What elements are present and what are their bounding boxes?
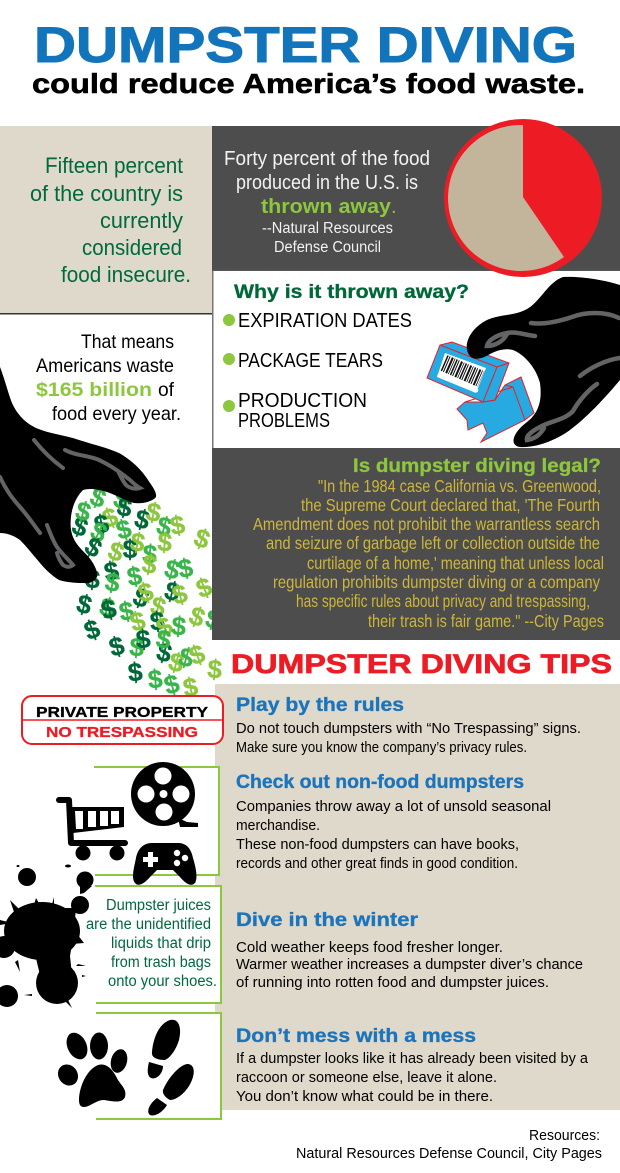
tip: play by the rules [236, 695, 581, 756]
tip: dive in the winter: Dive in the winter [236, 910, 419, 931]
icon: game controller [133, 843, 196, 885]
panel: forty percent: Forty percent of the food [224, 148, 430, 170]
icon: falling money: $ [185, 600, 210, 633]
tip: dive in the winter: of running into rotten food and dumpster juices. [236, 974, 549, 991]
icon: falling money: $ [106, 630, 128, 663]
text: americans waste [36, 331, 181, 425]
text: americans waste: $165 billion [36, 379, 152, 401]
tip: play by the rules: Make sure you know the company’s privacy rules. [236, 739, 527, 756]
panel: food insecurity: of the country is [30, 181, 183, 206]
icon: falling money: $ [192, 571, 216, 604]
icon: falling money: $ [140, 548, 160, 580]
subtitle: could reduce America’s food waste. [32, 68, 585, 99]
icon: falling money: $ [127, 605, 149, 638]
icon: falling money: $ [73, 588, 96, 621]
icon: falling money: $ [110, 483, 133, 516]
tip: play by the rules: Play by the rules [236, 695, 404, 716]
icon: falling money: $ [128, 526, 148, 558]
heading: tips: DUMPSTER DIVING TIPS [231, 649, 612, 679]
icon: paw print [54, 1029, 130, 1107]
resources [296, 1127, 602, 1162]
text: dumpster juices: from trash bags [111, 954, 211, 971]
panel: why thrown away [212, 270, 620, 448]
tip: dive in the winter: Cold weather keeps food fresher longer. [236, 939, 503, 956]
panel: forty percent: . [391, 196, 397, 218]
icon: falling money: $ [181, 671, 201, 703]
text: americans waste: That means [81, 331, 174, 353]
tip: mess: Don’t mess with a mess [236, 1026, 476, 1047]
icon: falling money: $ [86, 515, 112, 549]
panel: forty percent: --Natural Resources [262, 220, 393, 237]
heading: why: Why is it thrown away? [234, 282, 469, 303]
panel: food insecurity: food insecure. [61, 262, 191, 287]
icon: falling money: $ [104, 535, 129, 568]
heading: legal: Is dumpster diving legal? [353, 456, 601, 477]
icon: falling money: $ [131, 503, 154, 536]
icon: falling money: $ [127, 656, 144, 688]
icon: falling money: $ [135, 576, 157, 609]
list: reasons [223, 310, 412, 432]
panel: food insecurity: Fifteen percent [45, 153, 183, 178]
panel: tips background [215, 684, 620, 1110]
icon: falling money: $ [190, 522, 215, 555]
list: reasons: EXPIRATION DATES [238, 310, 412, 332]
icon: falling money: $ [169, 578, 191, 611]
icon: falling money: $ [170, 610, 188, 642]
icon: falling money: $ [176, 552, 196, 584]
panel: food insecurity [0, 126, 212, 314]
icon: falling money: $ [154, 623, 174, 655]
icon: falling money: $ [80, 613, 104, 646]
tip: play by the rules: Do not touch dumpsters with “No Trespassing” signs. [236, 720, 581, 737]
bracket: non-food [94, 767, 219, 875]
title: DUMPSTER DIVING [34, 17, 577, 73]
pie chart [444, 119, 602, 277]
icon: falling money: $ [72, 495, 95, 528]
panel: is it legal [212, 448, 620, 640]
panel: forty percent: thrown away [261, 196, 392, 218]
tip: non-food dumpsters: records and other great finds in good condition. [236, 855, 518, 872]
list: reasons: PRODUCTION [238, 390, 367, 412]
tip: mess: You don’t know what could be in there. [236, 1088, 493, 1105]
panel: food insecurity: currently [100, 208, 183, 233]
icon: shoe prints [148, 1020, 194, 1115]
icon: falling money: $ [161, 668, 183, 701]
icon: falling money: $ [115, 491, 135, 523]
icon: black hand dropping money [0, 367, 156, 583]
icon: falling money: $ [165, 646, 188, 679]
icon: falling money: $ [84, 563, 102, 595]
icon: falling money: $ [96, 591, 119, 624]
icon: falling money: $ [161, 575, 184, 608]
text: dumpster juices: are the unidentified [86, 916, 211, 933]
icon: falling money: $ [123, 534, 138, 564]
icon: falling money: $ [86, 481, 111, 514]
tip: mess: raccoon or someone else, leave it alone. [236, 1069, 497, 1086]
icon: falling money: $ [156, 526, 174, 558]
sign: no trespassing: NO TRESPASSING [46, 725, 198, 741]
panel: forty percent [212, 126, 620, 270]
panel: forty percent: Defense Council [274, 239, 381, 256]
icon: falling money: $ [147, 663, 164, 695]
icon: shopping cart [59, 800, 125, 860]
tip: non-food dumpsters: Companies throw away a lot of unsold seasonal [236, 798, 551, 815]
icon: splatter [0, 864, 94, 1008]
icon: falling money: $ [144, 496, 164, 528]
icon: falling money: $ [128, 631, 146, 663]
text: dumpster juices [86, 897, 217, 990]
icon: torn package [427, 342, 534, 442]
resources: Natural Resources Defense Council, City Pages [296, 1145, 602, 1162]
tip: mess: If a dumpster looks like it has already been visited by a [236, 1050, 589, 1067]
text: dumpster juices: onto your shoes. [108, 973, 217, 990]
text: dumpster juices: liquids that drip [111, 935, 211, 952]
panel: forty percent: produced in the U.S. is [236, 172, 418, 194]
tip: mess [236, 1026, 589, 1105]
list: reasons: PROBLEMS [238, 410, 330, 432]
sign: no trespassing: PRIVATE PROPERTY [36, 705, 208, 721]
quote: city pages [253, 476, 604, 631]
tip: non-food dumpsters: These non-food dumpsters can have books, [236, 836, 519, 853]
icon: falling money: $ [117, 595, 137, 627]
icon: falling money: $ [147, 590, 170, 623]
icon: falling money: $ [161, 553, 184, 586]
icon: falling money: $ [135, 623, 152, 655]
icon: falling money: $ [149, 605, 166, 637]
list: reasons: PACKAGE TEARS [238, 350, 383, 372]
icon: falling money: $ [98, 501, 122, 534]
text: dumpster juices: Dumpster juices [106, 897, 211, 914]
sign: no trespassing [22, 696, 223, 744]
icon: falling money: $ [98, 593, 120, 626]
icon: falling money: $ [113, 513, 135, 546]
tip: non-food dumpsters [236, 772, 551, 872]
icon: falling money [68, 481, 225, 703]
icon: film reel [131, 762, 198, 827]
icon: falling money: $ [102, 555, 122, 587]
icon: falling money: $ [175, 641, 198, 674]
icon: black hand holding box [467, 277, 620, 447]
icon: falling money: $ [168, 509, 188, 541]
tip: non-food dumpsters: Check out non-food dumpsters [236, 772, 524, 793]
tip: dive in the winter: Warmer weather increases a dumpster diver’s chance [236, 956, 583, 973]
bracket: juices [95, 886, 221, 1003]
tip: non-food dumpsters: merchandise. [236, 817, 320, 834]
icon: falling money: $ [206, 653, 224, 685]
icon: falling money: $ [153, 510, 176, 543]
text: americans waste: food every year. [52, 403, 181, 425]
icon: falling money: $ [68, 510, 93, 543]
icon: falling money: $ [202, 603, 225, 636]
icon: falling money: $ [103, 566, 123, 598]
bracket: mess [96, 1013, 221, 1119]
icon: falling money: $ [129, 581, 154, 614]
icon: falling money: $ [80, 531, 108, 564]
icon: barcode [437, 353, 486, 393]
icon: falling money: $ [92, 508, 112, 540]
icon: falling money: $ [125, 560, 145, 592]
panel: food insecurity: considered [82, 235, 182, 260]
text: americans waste: of [158, 379, 175, 401]
icon: falling money: $ [141, 538, 159, 570]
icon: falling money: $ [153, 636, 176, 669]
icon: falling money: $ [185, 638, 209, 671]
icon: falling money: $ [151, 610, 178, 643]
resources: Resources: [529, 1127, 600, 1144]
text: americans waste: Americans waste [36, 355, 174, 377]
tip: dive in the winter [236, 910, 583, 991]
